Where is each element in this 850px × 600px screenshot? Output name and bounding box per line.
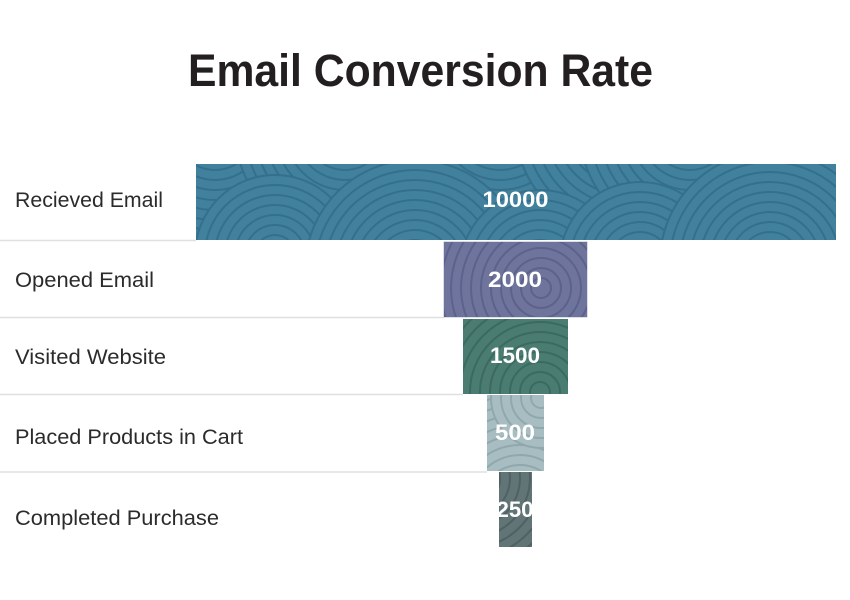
funnel bar: 10000: 10000 [482,187,548,212]
funnel bar: 250: 250 [496,497,534,522]
funnel bar: 250 [499,472,532,547]
row: Completed Purchase: Completed Purchase [15,507,219,530]
funnel bar: 500: 500 [495,420,535,445]
funnel bar: 500 [487,395,544,471]
funnel bar: 2000 [444,242,588,318]
funnel bar: 1500: 1500 [490,343,540,368]
funnel bar: 2000: 2000 [488,267,542,292]
row: Recieved Email: Recieved Email [15,189,163,212]
row: Placed Products in Cart: Placed Products in Cart [15,426,243,449]
funnel bar: 1500 [463,319,568,394]
row: Opened Email: Opened Email [15,269,154,292]
funnel bar: 10000 [196,164,836,240]
title: Email Conversion Rate [188,45,653,96]
row: Visited Website: Visited Website [15,346,166,369]
